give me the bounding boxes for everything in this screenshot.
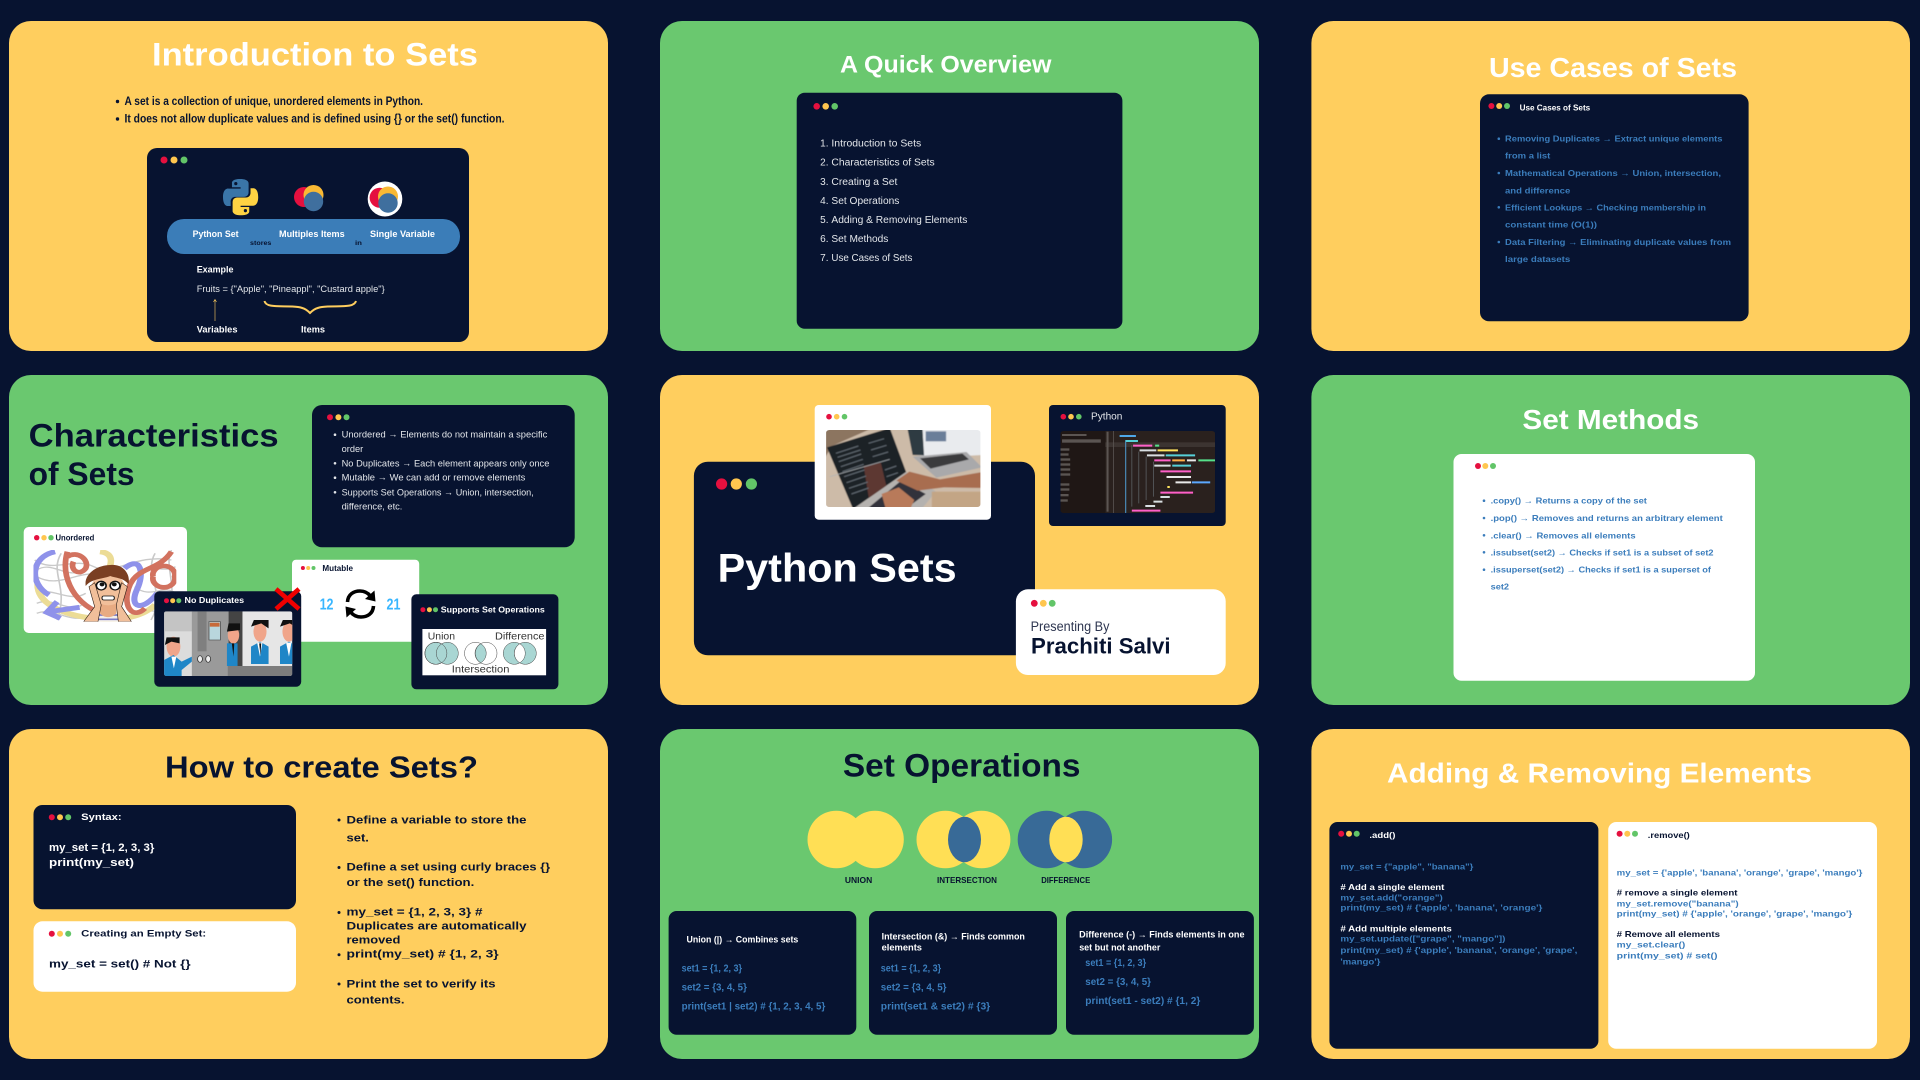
use cases bullets: from a list [1505,151,1550,161]
steps bullets [338,814,551,1006]
methods bullets: set2 [1491,582,1509,592]
steps bullets: Define a variable to store the [346,814,526,826]
venn: intersection: INTERSECTION [937,875,997,885]
card: union code [669,911,856,1035]
characteristics bullets: Supports Set Operations → Union, intersection, [342,487,534,498]
venn: intersection [916,811,1010,885]
window controls [420,607,438,612]
agenda text [820,139,967,264]
card: union code: Union (|) → Combines sets [686,934,798,944]
venn diagrams: union, intersection, difference: Intersection [452,665,509,676]
window controls [1338,831,1360,837]
labels: variables and items [197,325,325,336]
steps bullets: set. [346,833,369,845]
heading: introduction to sets: Introduction to Sets [152,37,478,73]
venn: difference [1018,811,1112,885]
union code lines [682,962,825,1012]
agenda text: Creating a Set [831,177,898,188]
difference description: Difference (-) → Finds elements in one [1079,929,1244,939]
window controls [49,814,71,820]
methods bullets [1483,496,1723,592]
window controls [160,156,188,164]
bullet text block: A set is a collection of unique, unordered elements in Python. [124,96,423,108]
characteristics bullets [334,430,549,513]
icon: multiple items circles [294,185,324,211]
methods bullets: .issubset(set2) → Checks if set1 is a subset of set2 [1491,547,1714,557]
illustration: identical men on conveyor [164,611,298,676]
use cases bullets: Removing Duplicates → Extract unique elements [1505,134,1723,144]
window: syntax [34,805,296,909]
characteristics bullets: Unordered → Elements do not maintain a specific [342,430,548,441]
steps bullets: or the set() function. [346,877,474,889]
agenda text: 2. [820,158,828,169]
brace: items [264,301,356,313]
window controls [826,414,847,420]
agenda text: Adding & Removing Elements [831,215,967,226]
panel: set operations [660,729,1259,1059]
window controls [716,478,757,490]
union code lines: print(set1 | set2) # {1, 2, 3, 4, 5} [682,1000,825,1012]
use cases bullets: Mathematical Operations → Union, intersection, [1505,168,1721,178]
card title: Python [1091,411,1122,422]
add code lines: # Add multiple elements [1340,923,1452,933]
window controls [34,535,54,540]
numbers swap: 12 and 21: 12 [320,596,334,613]
heading: use cases of sets: Use Cases of Sets [1489,52,1737,83]
remove code lines: my_set.clear() [1617,940,1686,950]
concept pill: Multiples Items [279,229,345,240]
window controls [1617,831,1638,837]
panel: use cases of sets [1311,21,1910,351]
venn diagrams: union, intersection, difference: Union [428,631,455,642]
methods bullets: .issuperset(set2) → Checks if set1 is a superset of [1491,565,1711,575]
window controls [1488,103,1510,109]
characteristics bullets: No Duplicates → Each element appears only once [342,458,549,469]
concept pill: Single Variable [370,229,435,240]
arrow: to variables [214,300,216,321]
difference description [1079,929,1244,952]
methods bullets: .clear() → Removes all elements [1491,530,1636,540]
use cases bullets: Efficient Lookups → Checking membership in [1505,202,1706,212]
window title: Use Cases of Sets [1520,102,1590,112]
window: agenda list [797,93,1122,329]
panel: python sets title slide [660,375,1259,705]
syntax code [49,842,155,869]
remove code lines: my_set.remove("banana") [1617,898,1739,908]
heading: characteristics of sets: of Sets [29,456,135,492]
agenda text: 1. [820,139,828,150]
window controls [164,598,181,603]
heading: how to create sets: How to create Sets? [165,749,478,784]
window controls [49,931,71,937]
difference code lines: set1 = {1, 2, 3} [1085,957,1146,969]
card: unordered [24,527,187,633]
card: mutable [292,560,419,642]
agenda text: Set Operations [831,196,899,207]
labels: variables and items: Variables [197,325,238,336]
example code: Example [197,265,234,276]
add code lines: print(my_set) # {'apple', 'banana', 'orange'} [1340,903,1543,913]
window title: Syntax: [81,812,122,823]
heading: characteristics of sets [29,418,279,492]
use cases bullets [1498,134,1731,264]
card: presenter [1016,589,1226,675]
intersection code lines: set1 = {1, 2, 3} [881,962,941,974]
add code lines: my_set.add("orange") [1340,892,1443,902]
window: add code [1329,822,1598,1049]
bullet text block: It does not allow duplicate values and is defined using {} or the set() function. [124,114,504,126]
syntax code: my_set = {1, 2, 3, 3} [49,842,155,854]
card: intersection code [869,911,1057,1035]
use cases bullets: Data Filtering → Eliminating duplicate values from [1505,237,1731,247]
icon: red cross [276,589,299,609]
window controls [1060,414,1082,420]
card title: No Duplicates [184,595,244,605]
heading: set operations: Set Operations [843,748,1080,784]
window: set methods list [1454,454,1755,681]
concept pill: in [355,240,362,247]
steps bullets: print(my_set) # {1, 2, 3} [346,949,500,961]
difference code lines: set2 = {3, 4, 5} [1085,976,1151,988]
add code lines: my_set = {"apple", "banana"} [1340,861,1474,871]
difference code lines: print(set1 - set2) # {1, 2} [1085,995,1200,1007]
card: difference code [1066,911,1254,1035]
characteristics bullets: difference, etc. [342,502,402,513]
intersection code lines: set2 = {3, 4, 5} [881,981,946,993]
concept pill: Python Set [193,229,239,240]
intersection code lines [881,962,990,1012]
window title: .remove() [1648,830,1690,840]
intersection description: Intersection (&) → Finds common [882,932,1025,942]
main title window [694,462,1035,655]
icon: python logo [223,179,258,215]
window: empty set [34,921,296,992]
panel: introduction to sets [9,21,608,351]
venn diagrams: union, intersection, difference [422,629,546,676]
intersection description: elements [882,942,922,952]
union code lines: set1 = {1, 2, 3} [682,962,742,974]
remove code lines: # remove a single element [1617,888,1738,898]
union code lines: set2 = {3, 4, 5} [682,981,747,993]
agenda text: Introduction to Sets [831,139,921,150]
photo: code on dark editor [1060,431,1215,513]
heading: characteristics of sets: Characteristics [29,418,279,454]
difference code lines [1085,957,1200,1007]
concept pill [167,219,460,254]
agenda text: Set Methods [831,234,888,245]
characteristics bullets: order [342,444,363,455]
main title: Python Sets [718,547,957,591]
add code lines [1340,861,1577,967]
window: remove code [1608,822,1877,1049]
card title: Mutable [322,564,354,573]
methods bullets: .pop() → Removes and returns an arbitrary element [1491,513,1723,523]
window controls [327,414,350,420]
agenda text: 7. [820,253,828,264]
example code: Fruits = {"Apple", "Pineappl", "Custard apple"} [197,284,385,295]
characteristics bullets: Mutable → We can add or remove elements [342,473,526,484]
methods bullets: .copy() → Returns a copy of the set [1491,496,1647,506]
photo: hands typing on laptops [824,428,983,509]
card title: Supports Set Operations [441,604,545,614]
icon: swap arrows [346,590,376,618]
remove code lines: # Remove all elements [1617,929,1720,939]
difference description: set but not another [1079,942,1161,952]
steps bullets: Duplicates are automatically [346,921,528,933]
window controls [301,566,316,570]
card: no duplicates [154,591,301,687]
heading: adding and removing elements: Adding & Removing Elements [1387,758,1812,789]
add code lines: my_set.update(["grape", "mango"]) [1340,934,1506,944]
presenter name: Prachiti Salvi [1031,633,1171,658]
steps bullets: Define a set using curly braces {} [346,862,551,874]
window controls [1031,600,1056,607]
use cases bullets: constant time (O(1)) [1505,220,1597,230]
heading: a quick overview: A Quick Overview [840,52,1052,79]
remove code lines: print(my_set) # {'apple', 'orange', 'grape', 'mango'} [1617,909,1853,919]
agenda text: Use Cases of Sets [831,253,912,264]
panel: set methods [1311,375,1910,705]
numbers swap: 12 and 21: 21 [386,596,401,613]
agenda text: 3. [820,177,828,188]
use cases bullets: and difference [1505,185,1571,195]
window: python set diagram [147,148,469,342]
remove code lines [1617,867,1863,961]
venn: difference: DIFFERENCE [1041,875,1090,885]
numbers swap: 12 and 21 [320,596,401,613]
card: laptop photo [815,405,991,520]
window title: Creating an Empty Set: [81,928,206,939]
steps bullets: Print the set to verify its [346,978,496,990]
empty set code: my_set = set() # Not {} [49,959,191,971]
agenda text: Characteristics of Sets [831,158,935,169]
add code lines: 'mango'} [1340,957,1381,967]
use cases bullets: large datasets [1505,254,1571,264]
illustration: confused person in tangled lines [35,550,176,622]
steps bullets: my_set = {1, 2, 3, 3} # [346,906,482,918]
bullet text block [116,96,505,126]
remove code lines: print(my_set) # set() [1617,951,1718,961]
panel: characteristics of sets [9,375,608,705]
window: use cases list [1480,94,1749,321]
panel: adding and removing elements [1311,729,1910,1059]
panel: how to create sets [9,729,608,1059]
presenter label: Presenting By [1031,619,1110,634]
card title: Unordered [56,534,94,542]
window: characteristics list [312,405,575,547]
panel: a quick overview [660,21,1259,351]
steps bullets: contents. [346,994,404,1006]
syntax code: print(my_set) [49,857,134,869]
venn: union [808,811,904,885]
remove code lines: my_set = {'apple', 'banana', 'orange', 'grape', 'mango'} [1617,867,1863,877]
window controls [1475,463,1496,469]
intersection description [882,932,1025,952]
card: supports set operations [411,594,558,689]
agenda text: 5. [820,215,828,226]
add code lines: # Add a single element [1340,882,1445,892]
window controls [813,103,838,110]
venn diagrams: union, intersection, difference: Difference [495,631,545,642]
venn: union: UNION [845,875,872,885]
window title: .add() [1369,830,1396,840]
agenda text: 4. [820,196,828,207]
concept pill: stores [250,240,272,247]
icon: single variable circle [368,182,402,216]
example code [197,265,385,295]
intersection code lines: print(set1 & set2) # {3} [881,1000,990,1012]
labels: variables and items: Items [301,325,325,336]
add code lines: print(my_set) # {'apple', 'banana', 'orange', 'grape', [1340,945,1577,955]
heading: set methods: Set Methods [1522,404,1699,435]
agenda text: 6. [820,234,828,245]
steps bullets: removed [346,935,400,947]
card: code photo [1049,405,1226,526]
